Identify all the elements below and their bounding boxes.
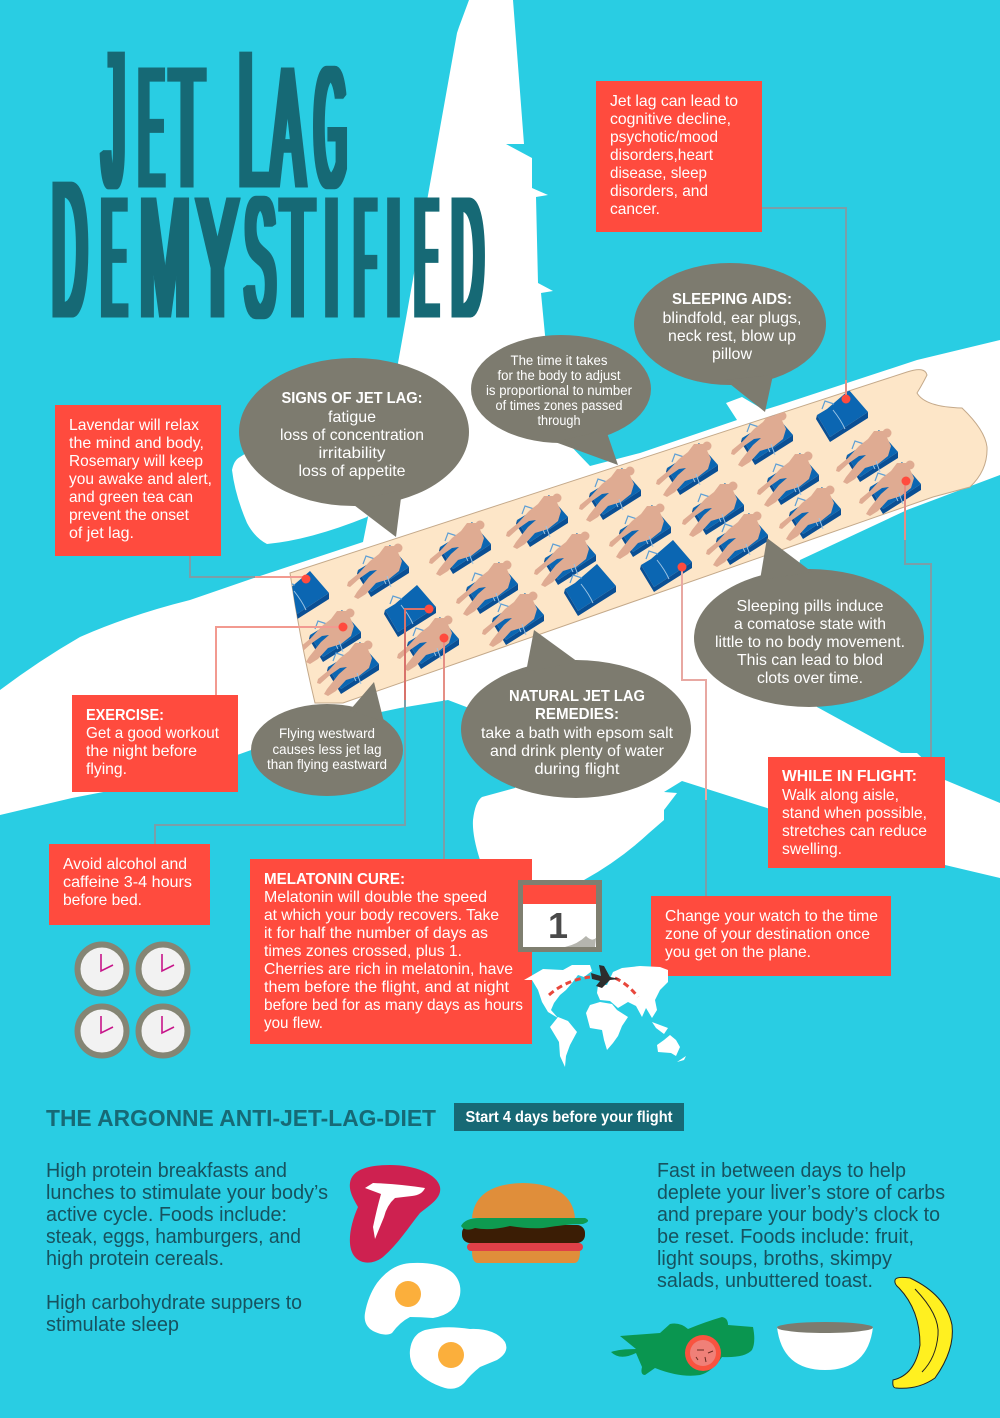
text: fasting days: light soups, broths, skimpy: [657, 1248, 892, 1270]
callout: melatonin: Melatonin will double the speed: [264, 889, 487, 906]
bubble: signs of jet lag: loss of concentration: [280, 427, 424, 444]
title: E: [139, 30, 163, 224]
text: fasting days: and prepare your body’s clock to: [657, 1204, 940, 1226]
callout: melatonin: Cherries are rich in melatonin, have: [264, 961, 513, 978]
callout: while in flight: swelling.: [782, 841, 842, 858]
icon: hamburger: [461, 1183, 588, 1263]
icon: salad: [611, 1317, 754, 1376]
bubble: sleeping aids: [634, 263, 826, 412]
callout: health risks: disorders, and: [610, 183, 708, 200]
bubble: time to adjust: The time it takes: [510, 353, 608, 368]
callout: alcohol: Avoid alcohol and: [63, 856, 187, 873]
callout: health risks: disorders,heart: [610, 147, 714, 164]
callout: lavender: and green tea can: [69, 489, 193, 506]
callout: lavender: [55, 405, 221, 556]
title: S: [245, 160, 275, 354]
bubble: sleeping pills: Sleeping pills induce: [736, 598, 884, 615]
text: protein breakfasts: high protein cereals.: [46, 1248, 224, 1270]
callout: lavender: the mind and body,: [69, 435, 204, 452]
bubble: sleeping pills: a comatose state with: [734, 616, 886, 633]
bubble: signs of jet lag: SIGNS OF JET LAG:: [282, 390, 422, 407]
icon: bowl: [777, 1322, 873, 1370]
callout: health risks: [596, 81, 762, 232]
callout: watch: Change your watch to the time: [665, 908, 878, 925]
title: F: [355, 160, 375, 354]
title: M: [140, 160, 190, 354]
text: protein breakfasts: active cycle. Foods include:: [46, 1204, 287, 1226]
bubble: flying westward: than flying eastward: [267, 757, 387, 772]
icon: calendar: 1: [548, 905, 568, 946]
callout: melatonin: at which your body recovers. Take: [264, 907, 499, 924]
bubble: sleeping aids: SLEEPING AIDS:: [672, 291, 792, 308]
bubble: sleeping aids: pillow: [712, 346, 752, 363]
callout: melatonin: MELATONIN CURE:: [264, 871, 405, 888]
callout: watch: you get on the plane.: [665, 944, 811, 961]
text: fasting days: [657, 1160, 945, 1292]
callout: watch: [651, 896, 891, 976]
airplane silhouette: [0, 0, 1000, 885]
bubble: natural remedies: REMEDIES:: [535, 706, 619, 723]
bubble: natural remedies: and drink plenty of water: [490, 743, 665, 760]
text: protein breakfasts: stimulate sleep: [46, 1314, 179, 1336]
callout: melatonin: [250, 859, 532, 1044]
title: T: [170, 30, 203, 224]
callout: while in flight: [768, 757, 945, 868]
bubble: signs of jet lag: fatigue: [328, 409, 376, 426]
connector end dots: [302, 394, 910, 642]
seats and passengers: [277, 390, 921, 696]
title: G: [315, 30, 346, 224]
bubble: sleeping aids: blindfold, ear plugs,: [662, 310, 802, 327]
bubble: sleeping pills: clots over time.: [757, 670, 863, 687]
bubble: time to adjust: is proportional to number: [486, 383, 632, 398]
title: A: [271, 30, 304, 224]
bubble: natural remedies: NATURAL JET LAG: [509, 688, 645, 705]
bubble: flying westward: causes less jet lag: [272, 742, 382, 757]
bubble: signs of jet lag: [239, 358, 469, 537]
bubble: signs of jet lag: loss of appetite: [298, 463, 406, 480]
bubble: time to adjust: through: [538, 413, 580, 428]
callout: while in flight: Walk along aisle,: [782, 787, 899, 804]
title: E: [416, 160, 438, 354]
text: protein breakfasts: lunches to stimulate your body’s: [46, 1182, 328, 1204]
callout: health risks: disease, sleep: [610, 165, 707, 182]
callout: while in flight: stretches can reduce: [782, 823, 927, 840]
callout: health risks: cognitive decline,: [610, 111, 731, 128]
text: protein breakfasts: steak, eggs, hamburgers, and: [46, 1226, 301, 1248]
icon: fried eggs: [365, 1263, 506, 1389]
text: fasting days: deplete your liver’s store of carbs: [657, 1182, 945, 1204]
icon: four clocks: [78, 944, 188, 1056]
callout: melatonin: them before the flight, and at night: [264, 979, 510, 996]
bubble: sleeping pills: [694, 538, 924, 707]
icon: banana: [893, 1277, 952, 1388]
label: start 4 days: [454, 1103, 684, 1131]
title: E: [102, 160, 126, 354]
connector lines: [155, 208, 931, 896]
callout: exercise: [72, 695, 238, 792]
callout: exercise: the night before: [86, 743, 197, 760]
title: I: [386, 160, 400, 354]
text: protein breakfasts: High carbohydrate suppers to: [46, 1292, 302, 1314]
callout: lavender: Lavendar will relax: [69, 417, 199, 434]
heading: Argonne diet: THE ARGONNE ANTI-JET-LAG-DIET: [46, 1105, 437, 1131]
callout: melatonin: it for half the number of days as: [264, 925, 488, 942]
callout: alcohol: [49, 844, 210, 925]
title: J: [103, 10, 124, 229]
callout: health risks: psychotic/mood: [610, 129, 718, 146]
icon: calendar: [518, 880, 602, 952]
callout: exercise: EXERCISE:: [86, 707, 164, 724]
title: I: [324, 160, 338, 354]
text: D: [452, 160, 483, 354]
label: start 4 days: Start 4 days before your flight: [466, 1109, 672, 1126]
callout: exercise: flying.: [86, 761, 127, 778]
bubble: time to adjust: of times zones passed: [496, 398, 622, 413]
callout: lavender: Rosemary will keep: [69, 453, 203, 470]
bubble: flying westward: [251, 682, 403, 796]
callout: melatonin: you flew.: [264, 1015, 323, 1032]
bubble: natural remedies: during flight: [534, 761, 620, 778]
callout: while in flight: WHILE IN FLIGHT:: [782, 768, 917, 785]
callout: health risks: Jet lag can lead to: [610, 93, 738, 110]
bubble: sleeping aids: neck rest, blow up: [668, 328, 796, 345]
icon: world map with flight path: [524, 965, 686, 1067]
bubble: natural remedies: take a bath with epsom salt: [481, 725, 674, 742]
icon: steak: [350, 1165, 440, 1263]
callout: melatonin: before bed for as many days as hours: [264, 997, 523, 1014]
callout: melatonin: times zones crossed, plus 1.: [264, 943, 462, 960]
bubble: signs of jet lag: irritability: [318, 445, 386, 462]
callout: health risks: cancer.: [610, 201, 660, 218]
text: fasting days: salads, unbuttered toast.: [657, 1270, 873, 1292]
text: fasting days: be reset. Foods include: fruit,: [657, 1226, 914, 1248]
cabin floor: [290, 370, 987, 703]
callout: while in flight: stand when possible,: [782, 805, 927, 822]
callout: alcohol: before bed.: [63, 892, 142, 909]
bubble: flying westward: Flying westward: [279, 726, 375, 741]
bubble: sleeping pills: little to no body movement.: [715, 634, 905, 651]
title: Y: [197, 160, 238, 354]
title: T: [281, 160, 314, 354]
text: protein breakfasts: High protein breakfasts and: [46, 1160, 287, 1182]
callout: watch: zone of your destination once: [665, 926, 870, 943]
callout: alcohol: caffeine 3-4 hours: [63, 874, 192, 891]
callout: lavender: prevent the onset: [69, 507, 190, 524]
title: L: [239, 10, 268, 229]
callout: exercise: Get a good workout: [86, 725, 220, 742]
text: fasting days: Fast in between days to help: [657, 1160, 906, 1182]
bubble: natural remedies: [461, 630, 691, 798]
bubble: time to adjust: [471, 335, 651, 465]
bubble: time to adjust: for the body to adjust: [498, 368, 621, 383]
text: protein breakfasts: [46, 1160, 328, 1336]
title: D: [53, 140, 87, 359]
bubble: sleeping pills: This can lead to blod: [737, 652, 883, 669]
title: [53, 10, 483, 359]
callout: lavender: you awake and alert,: [69, 471, 212, 488]
callout: lavender: of jet lag.: [69, 525, 134, 542]
